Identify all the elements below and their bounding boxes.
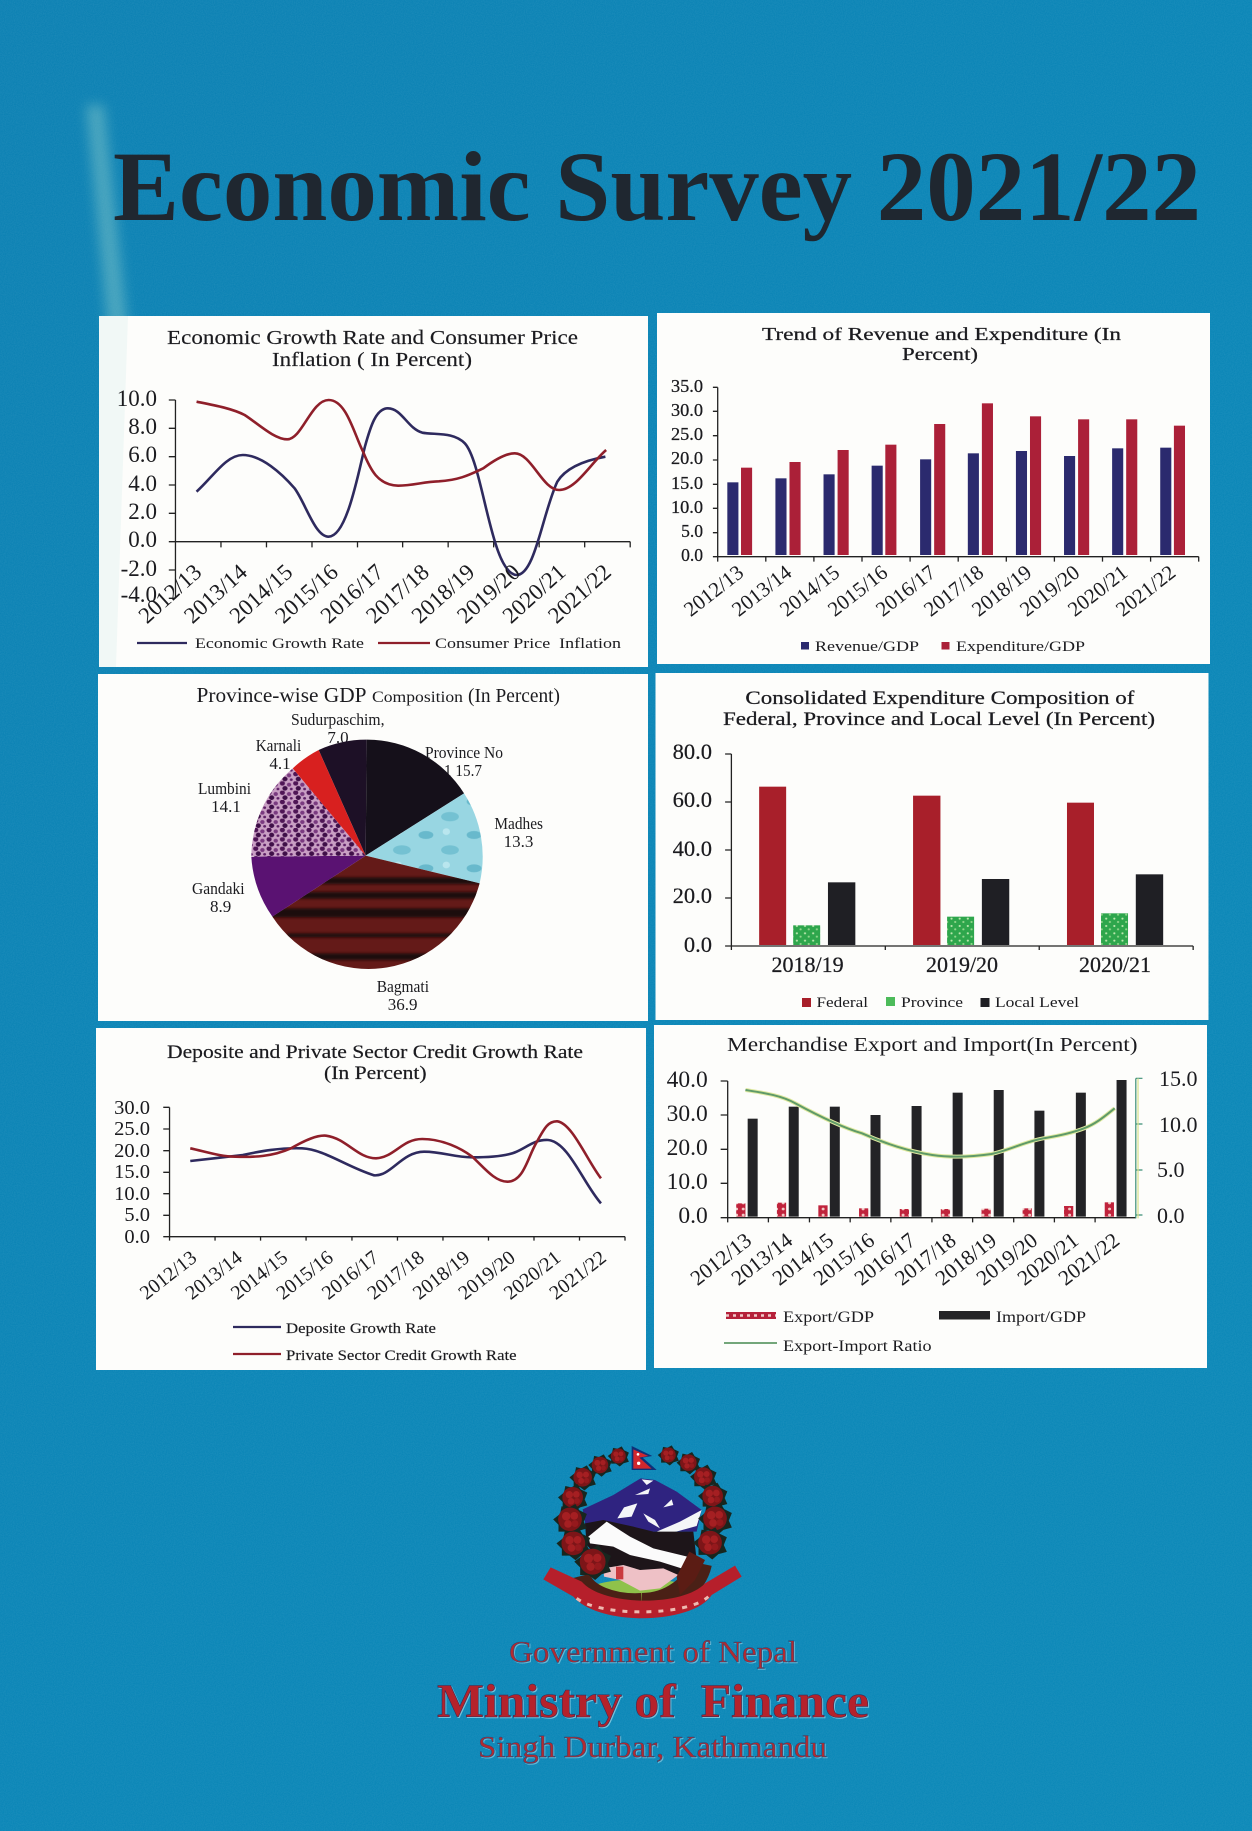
chart title: Merchandise Export and Import(In Percent) bbox=[727, 1034, 1138, 1056]
chart title bbox=[196, 683, 560, 707]
combo chart: 2016/17 bbox=[850, 1228, 920, 1290]
combo chart: 2013/14 bbox=[727, 1228, 797, 1290]
line chart: 2014/15 bbox=[225, 559, 297, 628]
bar chart: 40.0 bbox=[673, 836, 712, 861]
pie labels: Sudurpaschim, bbox=[291, 710, 384, 729]
legend: Province bbox=[901, 995, 963, 1011]
pie labels: 13.3 bbox=[504, 832, 533, 851]
pie chart bbox=[251, 740, 483, 969]
title: Economic Survey 2021/22 bbox=[113, 131, 1201, 242]
line chart: 2018/19 bbox=[407, 559, 479, 628]
line chart: 2013/14 bbox=[179, 559, 252, 628]
combo chart: 40.0 bbox=[667, 1067, 708, 1093]
line chart: 2016/17 bbox=[318, 1247, 383, 1304]
combo chart: 30.0 bbox=[667, 1101, 708, 1127]
bar chart: 20.0 bbox=[673, 883, 712, 908]
bar chart: 0.0 bbox=[684, 932, 712, 957]
line chart: 2.0 bbox=[128, 499, 157, 524]
chart title: Economic Growth Rate and Consumer Price bbox=[167, 328, 578, 349]
legend: Local Level bbox=[995, 995, 1079, 1011]
pie labels: Lumbini bbox=[198, 779, 251, 798]
bar chart: 10.0 bbox=[671, 497, 703, 517]
pie labels: 8.9 bbox=[210, 897, 231, 916]
pie labels: 4.1 bbox=[269, 754, 291, 773]
panel: economic growth rate and consumer price inflation bbox=[99, 316, 648, 667]
line chart: 10.0 bbox=[114, 1183, 150, 1205]
bar chart: 2018/19 bbox=[772, 952, 844, 977]
legend: Export/GDP bbox=[783, 1309, 874, 1326]
combo chart: 10.0 bbox=[1159, 1112, 1198, 1137]
combo chart: 2014/15 bbox=[768, 1228, 838, 1290]
line chart: 2021/22 bbox=[543, 559, 616, 628]
footer: government of Nepal: Government of Nepal bbox=[509, 1634, 797, 1669]
bar chart: 2013/14 bbox=[727, 560, 796, 621]
line chart: 2014/15 bbox=[227, 1247, 292, 1304]
combo chart: 2015/16 bbox=[809, 1228, 879, 1290]
bar chart: 2018/19 bbox=[967, 560, 1036, 621]
line chart: 20.0 bbox=[114, 1140, 150, 1162]
legend: Consumer Price Inflation bbox=[435, 636, 622, 652]
bar chart: 2012/13 bbox=[679, 560, 748, 621]
panel: deposit and private sector credit growth bbox=[96, 1028, 646, 1370]
chart title: (In Percent) bbox=[468, 685, 560, 707]
line chart: 6.0 bbox=[128, 442, 157, 467]
bar chart: 2021/22 bbox=[1111, 560, 1180, 621]
combo chart: 5.0 bbox=[1157, 1157, 1184, 1182]
chart title bbox=[723, 688, 1155, 730]
bar chart: 30.0 bbox=[671, 400, 703, 420]
bar chart: 80.0 bbox=[673, 739, 712, 764]
line chart: 0.0 bbox=[128, 527, 157, 552]
combo chart: 2018/19 bbox=[931, 1228, 1001, 1290]
line chart: -2.0 bbox=[121, 556, 157, 581]
legend: Import/GDP bbox=[996, 1309, 1086, 1326]
panel: merchandise export and import bbox=[654, 1025, 1207, 1368]
combo chart: 0.0 bbox=[1157, 1203, 1184, 1228]
line chart bbox=[114, 1097, 625, 1304]
combo chart: 2019/20 bbox=[972, 1228, 1042, 1290]
combo chart: 2012/13 bbox=[686, 1228, 756, 1290]
bar chart: 2014/15 bbox=[775, 560, 844, 621]
icon: motto ribbon bbox=[543, 1566, 742, 1618]
legend: Deposite Growth Rate bbox=[286, 1321, 436, 1337]
line chart: 15.0 bbox=[114, 1161, 150, 1183]
legend bbox=[724, 1309, 1086, 1355]
chart title: Trend of Revenue and Expenditure (In bbox=[762, 324, 1121, 345]
line chart: 8.0 bbox=[128, 414, 157, 439]
bar chart: 2015/16 bbox=[823, 560, 892, 621]
bar chart bbox=[673, 739, 1193, 977]
combo chart: 2021/22 bbox=[1054, 1228, 1124, 1290]
icon: flag bbox=[632, 1446, 657, 1470]
legend: Export-Import Ratio bbox=[783, 1338, 932, 1355]
line chart: 2020/21 bbox=[498, 559, 570, 628]
icon: green land and hands bbox=[578, 1563, 700, 1608]
line chart: -4.0 bbox=[121, 582, 157, 607]
combo chart: 2017/18 bbox=[890, 1228, 961, 1290]
pie labels: 1 15.7 bbox=[444, 761, 482, 780]
panel: province-wise GDP composition bbox=[98, 674, 648, 1021]
pie labels: 14.1 bbox=[211, 797, 241, 816]
bar chart: 2019/20 bbox=[926, 952, 998, 977]
line chart: 10.0 bbox=[117, 386, 157, 411]
bar chart: 2016/17 bbox=[871, 560, 940, 621]
bar chart: 2020/21 bbox=[1063, 560, 1132, 621]
line chart: 2020/21 bbox=[500, 1247, 565, 1304]
legend: Economic Growth Rate bbox=[195, 636, 364, 652]
line chart: 2019/20 bbox=[452, 559, 525, 628]
line chart: 30.0 bbox=[114, 1097, 150, 1119]
chart title: Percent) bbox=[902, 344, 978, 365]
footer: ministry of finance: Ministry of Finance bbox=[437, 1675, 869, 1728]
pie labels: Karnali bbox=[256, 736, 301, 755]
chart title: Composition bbox=[372, 689, 463, 706]
combo chart: 10.0 bbox=[667, 1169, 708, 1195]
line chart: 2017/18 bbox=[363, 1247, 429, 1304]
line chart: 25.0 bbox=[114, 1118, 150, 1140]
footer: address: Singh Durbar, Kathmandu bbox=[478, 1729, 827, 1764]
chart title: Federal, Province and Local Level (In Percent) bbox=[723, 709, 1155, 730]
line chart: 2016/17 bbox=[316, 559, 388, 628]
line chart: 2015/16 bbox=[270, 559, 343, 628]
icon: hills and snow band bbox=[585, 1520, 697, 1577]
line chart: 2019/20 bbox=[454, 1247, 520, 1304]
pie labels: 36.9 bbox=[388, 995, 417, 1014]
combo chart: 15.0 bbox=[1159, 1066, 1198, 1091]
combo chart: 2020/21 bbox=[1013, 1228, 1083, 1290]
line chart: 2015/16 bbox=[272, 1247, 338, 1304]
legend bbox=[801, 639, 1085, 655]
line chart: 2018/19 bbox=[409, 1247, 474, 1304]
legend: Expenditure/GDP bbox=[956, 639, 1085, 655]
icon: wreath bbox=[553, 1445, 732, 1595]
chart title bbox=[167, 1042, 583, 1084]
legend: Private Sector Credit Growth Rate bbox=[286, 1348, 517, 1364]
pie labels: Bagmati bbox=[377, 977, 429, 996]
line chart: 2017/18 bbox=[361, 559, 434, 628]
panel: consolidated expenditure composition bbox=[656, 673, 1208, 1020]
bar chart: 5.0 bbox=[681, 521, 703, 541]
legend: Revenue/GDP bbox=[815, 639, 919, 655]
chart title: Inflation ( In Percent) bbox=[272, 350, 472, 371]
legend bbox=[137, 636, 622, 652]
line chart: 2012/13 bbox=[134, 559, 206, 628]
pie labels: 7.0 bbox=[327, 728, 349, 747]
panel: trend of revenue and expenditure bbox=[657, 313, 1210, 664]
legend bbox=[802, 995, 1079, 1011]
combo chart: 0.0 bbox=[678, 1203, 708, 1229]
chart title: (In Percent) bbox=[324, 1063, 427, 1084]
line chart: 0.0 bbox=[124, 1226, 150, 1248]
line chart: 5.0 bbox=[124, 1204, 150, 1226]
icon: national emblem of Nepal bbox=[543, 1445, 742, 1618]
line chart: 4.0 bbox=[128, 471, 157, 496]
line chart: 2021/22 bbox=[545, 1247, 611, 1304]
chart title: Deposite and Private Sector Credit Growth Rate bbox=[167, 1042, 583, 1063]
pie labels: Gandaki bbox=[192, 879, 245, 898]
bar chart: 2017/18 bbox=[919, 560, 988, 621]
bar chart: 0.0 bbox=[681, 545, 703, 565]
pie labels: Madhes bbox=[494, 814, 543, 833]
combo chart: 20.0 bbox=[667, 1135, 708, 1161]
bar chart: 25.0 bbox=[671, 424, 703, 444]
bar chart: 2019/20 bbox=[1015, 560, 1084, 621]
line chart: 2013/14 bbox=[181, 1247, 247, 1304]
chart title: Consolidated Expenditure Composition of bbox=[745, 688, 1135, 709]
pie labels: Province No bbox=[425, 743, 503, 762]
legend: Federal bbox=[816, 995, 868, 1011]
bar chart bbox=[671, 376, 1199, 621]
line chart: 2012/13 bbox=[136, 1247, 201, 1304]
chart title bbox=[167, 328, 578, 371]
icon: mountain bbox=[583, 1478, 702, 1533]
pie labels bbox=[192, 710, 543, 1014]
bar chart: 15.0 bbox=[671, 473, 703, 493]
chart title: Province-wise GDP bbox=[196, 683, 366, 707]
bar chart: 20.0 bbox=[671, 448, 703, 468]
legend bbox=[233, 1321, 517, 1364]
bar chart: 35.0 bbox=[671, 376, 703, 396]
chart title bbox=[762, 324, 1121, 365]
bar chart: 60.0 bbox=[673, 787, 712, 812]
combo chart bbox=[667, 1066, 1198, 1290]
line chart bbox=[117, 386, 630, 628]
bar chart: 2020/21 bbox=[1079, 952, 1151, 977]
